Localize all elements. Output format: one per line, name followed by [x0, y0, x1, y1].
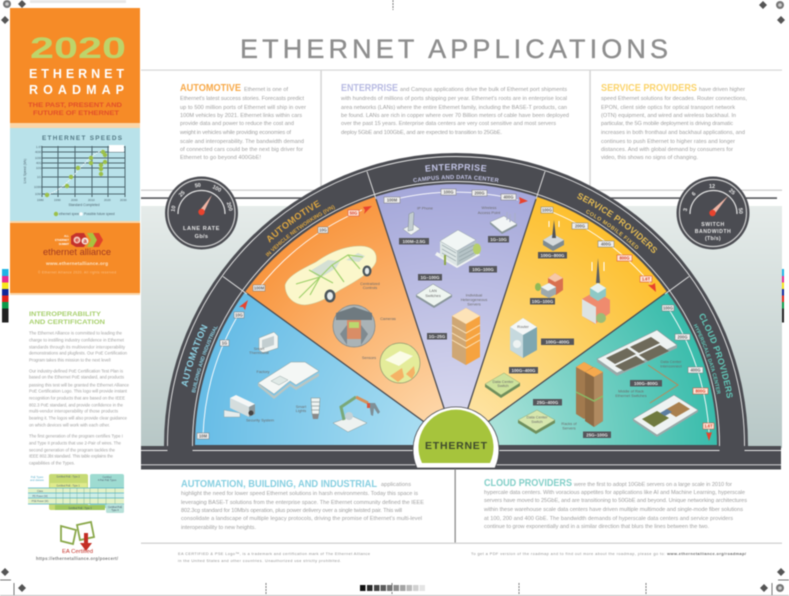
axis labels: 1990	[54, 198, 61, 202]
band label: automotive: AUTOMOTIVE	[266, 200, 322, 243]
text block: service providers: EPON, client side optics for optical transport network	[601, 105, 735, 111]
icon: smart lights: Smart	[296, 404, 307, 409]
text block: cloud providers: hypercale data centers. With voracious appetites for applications like AI and Machine Learning, hyperscale	[484, 490, 745, 496]
text block: automotive: Ethernet is one of	[244, 87, 288, 93]
gauge: switch bandwidth: 25	[727, 188, 736, 197]
icon: EA Certified logo	[61, 522, 94, 555]
text block: enterprise	[340, 83, 569, 136]
icon: wireless access point: 1G–10G	[490, 237, 507, 242]
text block: cloud providers	[483, 478, 747, 530]
text block: automotive: Ethernet's latest success stories. Forecasts predict	[180, 96, 304, 102]
band label: cloud providers: CLOUD PROVIDERS	[699, 313, 734, 399]
gauge: switch bandwidth: (Tb/s)	[705, 236, 721, 242]
icon: racks of servers: Racks of	[561, 421, 577, 426]
icon: central office with tower	[582, 258, 610, 324]
icon: sensors inset: Sensors	[362, 355, 376, 360]
axis labels: 2000	[71, 198, 78, 202]
speed track: cloud providers: 400G	[690, 368, 701, 372]
network link line	[648, 365, 678, 403]
text block: automation, building, and industrial: applications	[381, 482, 411, 488]
icon: middle of rack switches: 100G–800G	[634, 381, 659, 386]
text block: enterprise: with hundreds of millions of ports shipping per year. Ethernet's roots are in enterprise local	[340, 96, 567, 102]
PoE types table: and classes	[30, 478, 45, 482]
band label: automation: AUTOMATION	[181, 324, 208, 388]
PoE types table: Class	[37, 490, 44, 493]
axis labels: Link Speed (b/s)	[23, 159, 27, 183]
icon: cell tower: 100G–800G	[541, 253, 565, 258]
website: www.ethernetalliance.org	[45, 261, 108, 267]
band rings	[168, 157, 744, 450]
body text: charge to instilling industry confidence in Ethernet	[29, 338, 125, 342]
PoE types table: 4-Pair PoE Types	[98, 479, 117, 482]
certification URL: https://ethernetalliance.org/poecert/	[36, 556, 119, 561]
text block: service providers: continues to push Ethernet to higher rates and longer	[601, 139, 735, 145]
icon: security camera: Security System	[246, 418, 274, 422]
axis labels: 40G	[36, 161, 42, 165]
footnote: EA certified trademark: in the United States and other countries. Unauthorized use strictly prohibited.	[178, 558, 341, 563]
icon: data center switch, cloud	[518, 410, 555, 434]
gauge: switch bandwidth: 50	[737, 208, 743, 214]
text block: service providers: distances. And with global demand by consumers for	[601, 147, 733, 153]
gauge: switch bandwidth: SWITCH	[701, 222, 725, 228]
gauge: lane rate: 25	[178, 190, 187, 199]
text block: service providers: increases in both fronthaul and backhaul applications, and	[601, 130, 745, 136]
icon: smart lights	[296, 398, 320, 419]
icon: alliance logo: ALL	[64, 234, 69, 238]
body text: bearing it. The logos will also provide clear guidance	[29, 416, 128, 420]
icon: enterprise building	[435, 230, 497, 272]
gauge: lane rate: LANE RATE	[183, 226, 220, 232]
icon: IP phone	[399, 206, 433, 244]
gauge: switch bandwidth: BANDWIDTH	[695, 229, 731, 235]
body text: IEEE 802.3bt standard. This table explains the	[29, 454, 114, 458]
wedge: automation	[195, 292, 456, 445]
gauge: switch bandwidth: 6	[691, 191, 697, 197]
icon: IP phone: 100M–2.5G	[403, 239, 426, 244]
body text: 802.3 PoE standard, and provide confidence in the	[29, 402, 124, 408]
heading: 2020: 2020	[30, 32, 126, 65]
icon: middle of rack switches: Middle of Rack	[618, 388, 644, 394]
icon: racks of servers: Servers	[562, 426, 576, 430]
icon: LAN switches: LAN	[429, 288, 437, 293]
text block: automotive: AUTOMOTIVE	[180, 83, 241, 94]
text block: service providers: (OTN) equipment, and wired and wireless backhaul. In	[601, 113, 736, 119]
icon: car with network: Centralized	[360, 281, 380, 286]
text block: service providers: SERVICE PROVIDERS	[601, 83, 697, 94]
speed track: enterprise: 100M	[387, 198, 398, 202]
panel: interoperability and certification	[28, 311, 130, 561]
icon: data center switch, service	[485, 367, 538, 398]
band label: service providers: SERVICE PROVIDERS	[576, 192, 658, 254]
chart grid	[42, 146, 125, 197]
icon: small office buildings	[530, 273, 563, 304]
icon: car with network	[285, 246, 380, 305]
chart legend	[54, 145, 124, 216]
icon: alliance logo: SUMMIT	[59, 242, 69, 246]
text block: automation, building, and industrial: interoperability to new heights.	[181, 525, 256, 531]
icon: router: Router	[517, 324, 530, 329]
icon: data center interconnect: Data Center	[661, 359, 682, 364]
text block: cloud providers: at 100, 200 and 400 GbE. The bandwidth demands of hyperscale data centers and service providers	[484, 516, 733, 522]
logo wordmark: ethernet alliance	[43, 247, 111, 258]
PoE types table: Certified PoE - Type 2	[56, 476, 80, 478]
chart legend: Possible future speed	[84, 212, 115, 216]
PoE types table: PD Power (W)	[32, 495, 48, 498]
text block: automotive: provide data and power to reduce the cost and	[180, 121, 294, 127]
colour bar left	[2, 269, 8, 322]
icon: data center interconnect	[597, 330, 683, 376]
heading: INTEROPERABILITY	[29, 311, 101, 318]
body text: PoE Certification Logo. This logo will provide instant	[29, 388, 128, 394]
divider: lower columns	[454, 469, 456, 543]
band label: automotive: IN VEHICLE NETWORKING (IVN)	[265, 204, 336, 257]
icon: alliance logo: a	[83, 239, 87, 245]
text block: service providers	[601, 83, 747, 161]
icon: car with network: Controls	[363, 285, 377, 290]
wedge: enterprise	[375, 184, 537, 445]
icon: factory: Factory	[257, 369, 270, 374]
icon: alliance logo	[55, 233, 103, 247]
speed track: enterprise: 200G	[474, 190, 485, 196]
gauge: switch bandwidth: 3	[683, 208, 689, 212]
icon: data center switch, cloud: Switch	[531, 419, 543, 424]
band label: service providers: COLO MOBILE FIXED	[586, 209, 639, 250]
gauge: lane rate: 50	[194, 183, 201, 189]
text block: automotive: scale and interoperability. The bandwidth demand	[180, 139, 304, 145]
icon: LAN switches: 1G–100G	[420, 275, 440, 280]
band label: automation	[181, 324, 218, 394]
body text: demonstrations and plugfests. Our PoE Certification	[29, 350, 128, 356]
icon: small office buildings: 10G–100G	[532, 299, 554, 304]
PoE types table: Certified PoE	[108, 506, 122, 509]
gauge: switch bandwidth: 12	[709, 184, 715, 190]
speed track: cloud providers: 800G	[695, 388, 706, 394]
icon: router: 100G–400G	[546, 340, 570, 344]
icon: cameras inset	[333, 305, 396, 347]
outer dark band	[164, 153, 748, 450]
body text: standards through its multivendor interoperability	[29, 344, 126, 350]
heading: Ethernet Roadmap: ROADMAP	[29, 83, 124, 97]
body text: second generation of the program tackles the	[29, 448, 116, 452]
axis labels: 10M	[35, 192, 41, 196]
band label: cloud providers: HYPERSCALE DATA CENTER	[693, 324, 721, 394]
text block: service providers: speed Ethernet solutions for decades. Router connections,	[601, 96, 747, 102]
text block: automotive: up to 500 million ports of Ethernet will ship in over	[180, 105, 306, 111]
speed track: automotive	[253, 206, 372, 291]
speed track: automotive: 50G	[350, 210, 357, 216]
icon: wireless access point: Wireless	[482, 205, 497, 210]
axis labels: 400G	[35, 150, 43, 154]
chart legend: ethernet speed	[59, 212, 80, 216]
speed track: service providers: 800G	[619, 256, 630, 260]
icon: IP phone: IP Phone	[417, 206, 433, 210]
page title: ETHERNET APPLICATIONS	[240, 34, 668, 64]
panel: Ethernet Alliance	[10, 223, 140, 295]
text block: automotive	[179, 83, 306, 161]
text block: cloud providers: were the first to adopt 10GbE servers on a large scale in 2010 for	[573, 482, 732, 488]
band label: enterprise: ENTERPRISE	[424, 163, 487, 172]
body text: The first generation of the program certifies Type I	[29, 434, 123, 438]
icon: sensors inset	[362, 343, 420, 383]
speed track: cloud providers: 200G	[677, 334, 688, 340]
text block: automotive: Ethernet to go beyond 400GbE!	[180, 155, 261, 161]
icon: heterogeneous servers	[427, 292, 487, 365]
body text: capabilities of the Types.	[29, 460, 75, 466]
text block: automation, building, and industrial: highlight the need for lower speed Ethernet solutions in harsh environments. Today this space is	[181, 491, 418, 497]
text block: automotive: 100M vehicles by 2021. Ethernet links within cars	[180, 113, 302, 119]
text block: automotive: weight in vehicles while providing economies of	[179, 130, 291, 136]
panel: Ethernet speeds chart	[10, 128, 140, 223]
icon: racks of servers: 25G–100G	[586, 432, 608, 438]
heading: Ethernet Roadmap: ETHERNET	[29, 67, 124, 81]
heading: Ethernet Roadmap	[29, 67, 124, 97]
panel: Ethernet speeds chart: ETHERNET SPEEDS	[42, 135, 123, 142]
wedge: cloud providers	[456, 292, 717, 445]
icon: security camera	[224, 395, 274, 422]
grayscale bar	[360, 585, 425, 591]
speed track: automation: 10G	[235, 312, 243, 318]
frame lines	[141, 70, 782, 199]
icon: data center switch, service: Switch	[497, 383, 509, 388]
gauge: lane rate: 10	[171, 205, 178, 212]
axis labels: 2010	[88, 198, 95, 202]
heading	[29, 311, 105, 326]
icon: LAN switches: Switches	[425, 293, 441, 298]
axis labels: Standard Completed	[68, 203, 100, 207]
wedge: automotive	[245, 197, 456, 445]
hub: Ethernet dome: ETHERNET	[425, 440, 488, 452]
backdrop panel	[141, 206, 782, 448]
speed track: cloud providers: 100G	[663, 306, 673, 310]
body text: passing this test will be granted the Ethernet Alliance	[29, 382, 130, 388]
axis labels	[23, 145, 127, 207]
body text: based on the Ethernet PoE standard, and products	[29, 374, 124, 380]
speed track: automation: 10M	[199, 434, 208, 438]
icon: smart thermostat: Thermostat	[249, 350, 270, 355]
text block: service providers: have driven higher	[699, 87, 745, 93]
gauge: lane rate: Gb/s	[195, 234, 208, 240]
wedge: service providers	[456, 197, 667, 445]
speed track: service providers	[541, 207, 656, 292]
text block: enterprise: over the past 15 years. Enterprise data centers are very cost sensitive and most servers	[341, 121, 556, 127]
roadmap semicircle	[164, 153, 748, 450]
icon: alliance logo: ETHERNET	[55, 238, 69, 242]
PoE types table: PoE Types	[31, 475, 44, 479]
PoE types table	[28, 474, 124, 513]
gauge: switch bandwidth	[676, 176, 750, 250]
icon: data center interconnect: Interconnect	[660, 364, 683, 368]
sidebar panel: roadmap title	[10, 8, 140, 128]
speed track: cloud providers	[662, 305, 714, 441]
text block: automotive: of connected cars could be the next big driver for	[180, 147, 303, 153]
speed track: automotive: 10G	[319, 228, 327, 232]
band label: automation: BUILDING AND INDUSTRIAL	[191, 326, 218, 394]
speed track: automotive: 100M	[254, 286, 265, 290]
text block: service providers: video, this shows no signs of changing.	[601, 155, 698, 161]
text block: automation, building, and industrial: AUTOMATION, BUILDING, AND INDUSTRIAL	[181, 479, 377, 490]
icon: middle of rack switches	[615, 380, 698, 437]
axis labels: 1G	[37, 175, 42, 179]
axis labels: 100G	[35, 156, 43, 160]
speed track: cloud providers: 1.6T	[704, 424, 713, 428]
gauge: lane rate: 100	[211, 184, 222, 194]
axis labels: 10G	[36, 166, 42, 170]
PoE types table: Certified PoE - Type 1	[56, 484, 80, 488]
icon: wireless access point: Access Point	[478, 210, 501, 215]
speed track: enterprise	[384, 189, 528, 204]
footnote: EA certified trademark: EA CERTIFIED & PSE Logo™, is a trademark and certification mark of The Ethernet Alliance	[178, 551, 370, 556]
axis labels: 1980	[37, 198, 44, 202]
speed track: service providers: 1.6T	[642, 276, 651, 282]
text block: cloud providers: CLOUD PROVIDERS	[484, 478, 572, 489]
text block: automation, building, and industrial: 802.3cg standard for 10Mb/s operation, plus power delivery over a single twisted pair. This will	[181, 508, 402, 514]
icon: wireless access point	[478, 205, 517, 242]
icon: middle of rack switches: Ethernet Switches	[615, 393, 647, 398]
copyright: © Ethernet Alliance 2020. All rights reserved	[38, 270, 116, 274]
text block: automation, building, and industrial	[181, 479, 424, 531]
subtitle: THE PAST, PRESENT AND	[28, 102, 123, 109]
text block: cloud providers: servers have moved to 25GbE, and are transitioning to 50GbE and beyond. Unique networking architectures	[484, 498, 747, 504]
subtitle	[28, 102, 123, 117]
body text: multi-vendor interoperability of those products	[29, 408, 118, 414]
speed track: automation	[197, 300, 248, 439]
gauge: lane rate	[165, 176, 238, 250]
body text	[29, 330, 130, 466]
icon: factory	[257, 362, 319, 399]
speed curve	[47, 150, 104, 195]
icon: alliance logo: e	[75, 238, 79, 244]
icon: smart thermostat	[249, 332, 278, 355]
icon: robot arm	[333, 397, 380, 432]
axis labels: 2020	[104, 198, 111, 202]
body text: Program takes this mission to the next level!	[29, 358, 111, 362]
speed track: service providers: 400G	[601, 242, 611, 246]
text block: cloud providers: within these warehouse scale data centers have driven multiple multimode and single-mode fiber solutions	[483, 507, 743, 513]
icon: racks of servers	[533, 362, 611, 438]
text block: service providers: particular, the 5G mobile deployment is driving dramatic	[601, 121, 733, 127]
PoE types table: Certified PoE - Type 3	[68, 507, 92, 510]
heading: AND CERTIFICATION	[29, 319, 105, 326]
text block: automation, building, and industrial: consolidate a landscape of multiple legacy protocols, driving the promise of Ethernet's multi-level	[181, 516, 422, 522]
icon: heterogeneous servers: Individual	[466, 292, 482, 298]
icon: heterogeneous servers: Servers	[467, 302, 481, 306]
icon: router	[510, 318, 574, 358]
body text: Our industry-defined PoE Certification Test Plan is	[29, 368, 123, 374]
text block: enterprise: ENTERPRISE	[341, 83, 398, 94]
axis labels: 100M	[34, 185, 42, 189]
axis labels: 1.6T	[36, 145, 42, 149]
icon: heterogeneous servers: 1G–25G	[429, 334, 446, 339]
speed track: enterprise: 400G	[503, 194, 514, 200]
speed track: service providers: 200G	[575, 224, 585, 228]
hub: Ethernet dome	[413, 407, 499, 468]
axis labels: 2030	[120, 198, 127, 202]
icon: smart lights: Lights	[296, 408, 306, 413]
icon: data center switch, service: Data Center	[493, 379, 514, 384]
PoE types table: Certified	[103, 476, 112, 479]
icon: EA Certified logo: EA Certified	[62, 549, 93, 555]
speed track: service providers: 100G	[542, 208, 552, 212]
speed track: enterprise: 100G	[443, 190, 454, 194]
colour bar right	[777, 269, 784, 322]
text block: enterprise: area networks (LANs) where the entire Ethernet family, including the BASE-T products, can	[341, 105, 567, 111]
data points	[45, 150, 107, 197]
text block: enterprise: and Campus applications drive the bulk of Ethernet port shipments	[400, 87, 567, 93]
band label: enterprise	[412, 163, 500, 183]
icon: racks of servers: 25G–400G	[537, 400, 559, 405]
bottom band	[141, 446, 781, 470]
icon: cell tower	[538, 220, 567, 258]
body text: on which devices will work with each other.	[29, 422, 110, 428]
icon: enterprise building: 10G–100G	[472, 267, 494, 272]
footnote: EA certified trademark	[178, 551, 370, 563]
PoE types table: PSE Power (W)	[32, 500, 49, 503]
PoE types table: Type 4	[111, 509, 119, 512]
text block: enterprise: deploy 5GbE and 100GbE, and are expected to transition to 25GbE.	[341, 130, 502, 136]
text block: enterprise: be found. LANs are rich in copper where over 70 Billion meters of cable have been deployed	[341, 113, 569, 119]
speed track: automation: 1G	[222, 340, 227, 346]
subtitle: FUTURE OF ETHERNET	[33, 110, 119, 117]
text block: automation, building, and industrial: leveraging BASE-T solutions from the enterprise space. The Ethernet community defined the IEEE	[181, 500, 424, 506]
icon: smart thermostat: Smart	[254, 346, 265, 351]
footnote: roadmap PDF link: To get a PDF version of the roadmap and to find out more about the roadmap, please go to: www.ethernetalliance.org/roadmap/	[471, 551, 747, 556]
band label: enterprise: CAMPUS AND DATA CENTER	[412, 174, 500, 183]
body text: and Type II products that use 2-Pair of wires. The	[29, 440, 122, 446]
gauge: lane rate: 200	[225, 201, 233, 212]
icon: heterogeneous servers: Heterogeneous	[461, 297, 487, 302]
icon: cameras inset: Cameras	[380, 316, 396, 321]
icon: LAN switches	[416, 274, 452, 308]
text block: cloud providers: continue to grow exponentially and in a similar direction that blurs the lines between the two.	[484, 524, 709, 530]
body text: The Ethernet Alliance is committed to leading the	[29, 330, 123, 336]
icon: data center switch, service: 100G–400G	[512, 368, 536, 373]
icon: data center switch, cloud: Data Center	[527, 414, 548, 420]
body text: recognition for products that are based on the IEEE	[29, 396, 125, 400]
